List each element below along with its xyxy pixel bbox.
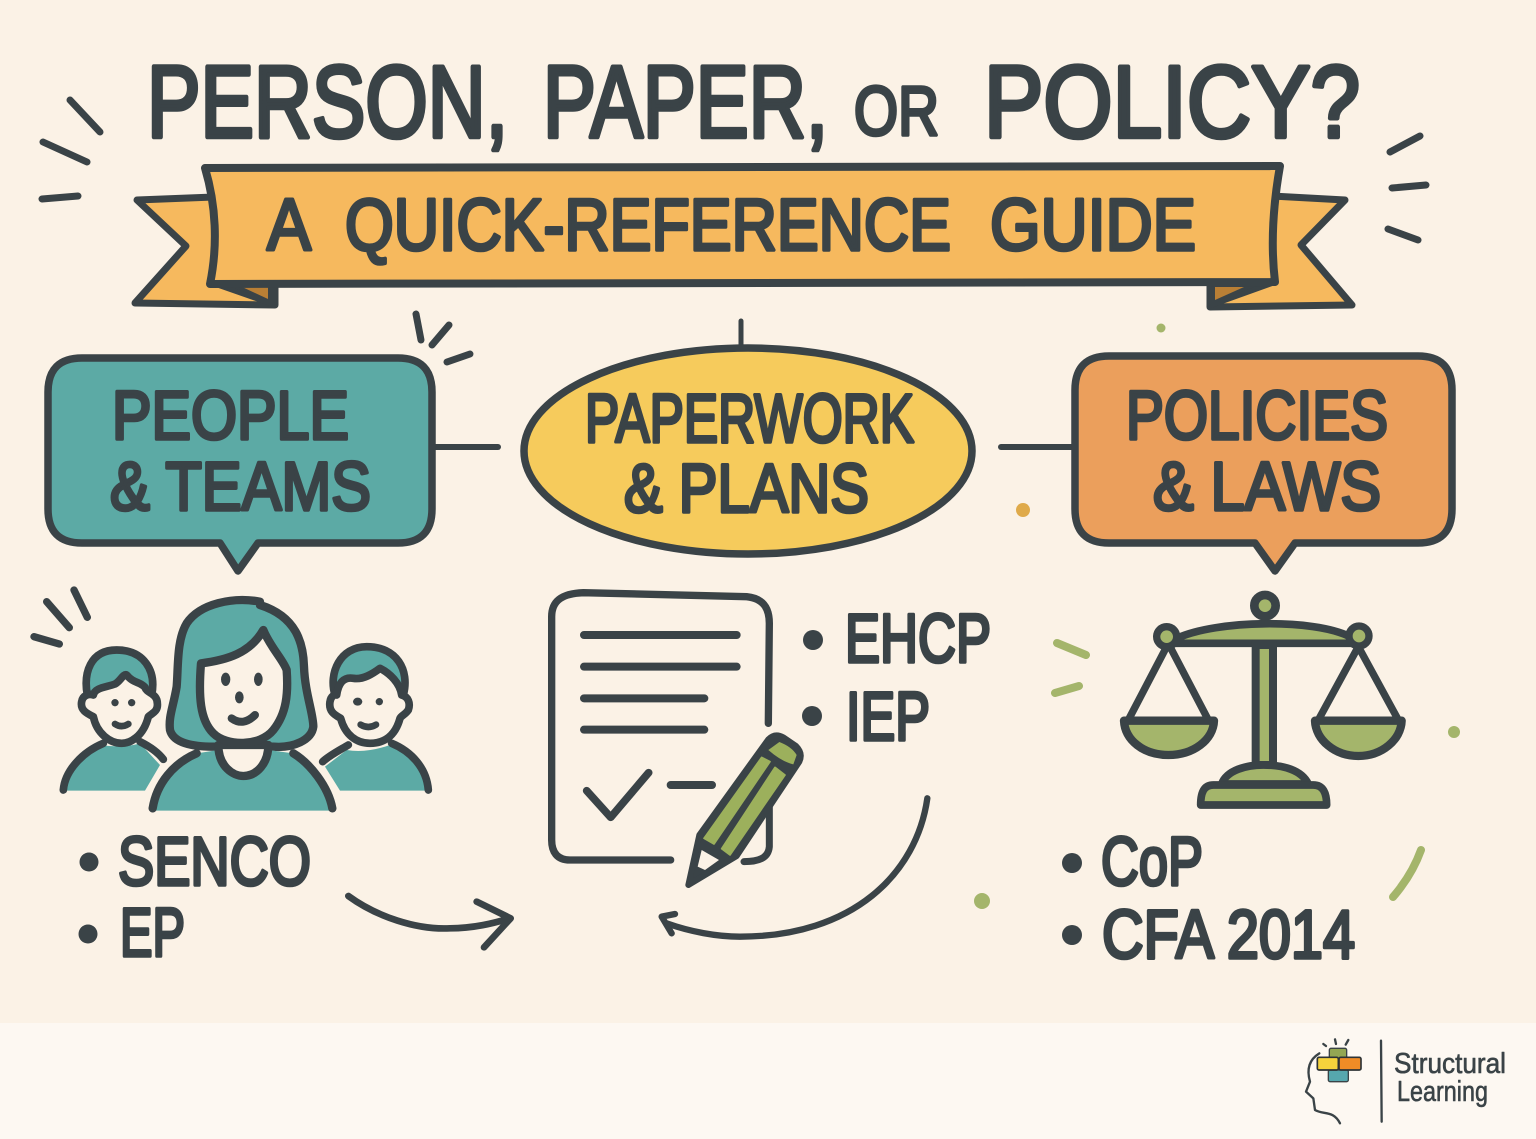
document outline [552, 593, 769, 860]
ribbon subtitle: QUICK-REFERENCE [345, 185, 951, 266]
pencil [688, 735, 801, 885]
connector right [1001, 444, 1075, 450]
panel: people and teams heading: & TEAMS [110, 448, 371, 525]
ribbon left fold [209, 282, 272, 304]
panel: policies and laws heading: POLICIES [1126, 377, 1388, 454]
logo: Structural Learning [1306, 1039, 1506, 1123]
panel: policies and laws heading [1075, 356, 1452, 571]
list: policies [1062, 823, 1355, 973]
beam [1173, 624, 1353, 643]
list: paperwork: EHCP [845, 600, 991, 677]
panel: paperwork and plans heading: PAPERWORK [585, 380, 914, 457]
icon: document and pencil [552, 593, 801, 885]
title: PERSON, [147, 45, 508, 159]
ribbon subtitle: GUIDE [990, 185, 1196, 266]
icon: scales of justice [1124, 595, 1402, 805]
list: people: EP [120, 894, 185, 971]
list: policies: CoP [1101, 823, 1203, 900]
decorative accents [974, 324, 1460, 909]
pans [1124, 721, 1214, 755]
footer band [0, 1023, 1536, 1139]
pan strings [1128, 647, 1398, 720]
post [1256, 645, 1273, 765]
panel: paperwork and plans heading: & PLANS [624, 450, 869, 527]
center person [153, 600, 332, 811]
check mark [587, 773, 649, 817]
panel: policies and laws heading: & LAWS [1153, 448, 1381, 525]
ribbon left tail [135, 197, 275, 305]
ribbon main band [205, 166, 1280, 284]
list: paperwork [802, 600, 991, 755]
logo: Structural Learning: Learning [1397, 1076, 1488, 1108]
logo text: Structural [1394, 1048, 1506, 1080]
sparks [34, 590, 87, 644]
arrow: people to paperwork [348, 896, 511, 947]
left person [63, 650, 163, 791]
arrow: curved return [662, 798, 927, 937]
ribbon left fold shade [240, 286, 268, 299]
list: people [78, 823, 311, 971]
base [1222, 765, 1308, 784]
knobs [1254, 595, 1276, 616]
right person [323, 647, 428, 791]
title sparks [42, 100, 1426, 240]
connector tick above paperwork [738, 321, 744, 348]
list: policies: CFA 2014 [1102, 896, 1355, 973]
title: PAPER, [543, 45, 828, 159]
panel: people and teams heading: PEOPLE [112, 377, 349, 454]
panel: paperwork and plans heading [524, 348, 972, 554]
title [147, 45, 1360, 159]
connector left [432, 444, 498, 450]
icon: three people [34, 590, 428, 811]
sparks by people box [416, 314, 470, 362]
logo icon [1306, 1039, 1382, 1123]
ribbon right fold [1212, 282, 1276, 305]
ribbon right tail [1210, 196, 1352, 307]
title: POLICY? [984, 45, 1360, 159]
ribbon right fold shade [1215, 287, 1244, 300]
list: paperwork: IEP [846, 678, 930, 755]
title: OR [854, 72, 939, 150]
document lines [584, 635, 737, 785]
ribbon banner [135, 166, 1352, 307]
ribbon subtitle: A [267, 185, 311, 266]
panel: people and teams heading [48, 358, 432, 571]
list: people: SENCO [118, 823, 311, 900]
